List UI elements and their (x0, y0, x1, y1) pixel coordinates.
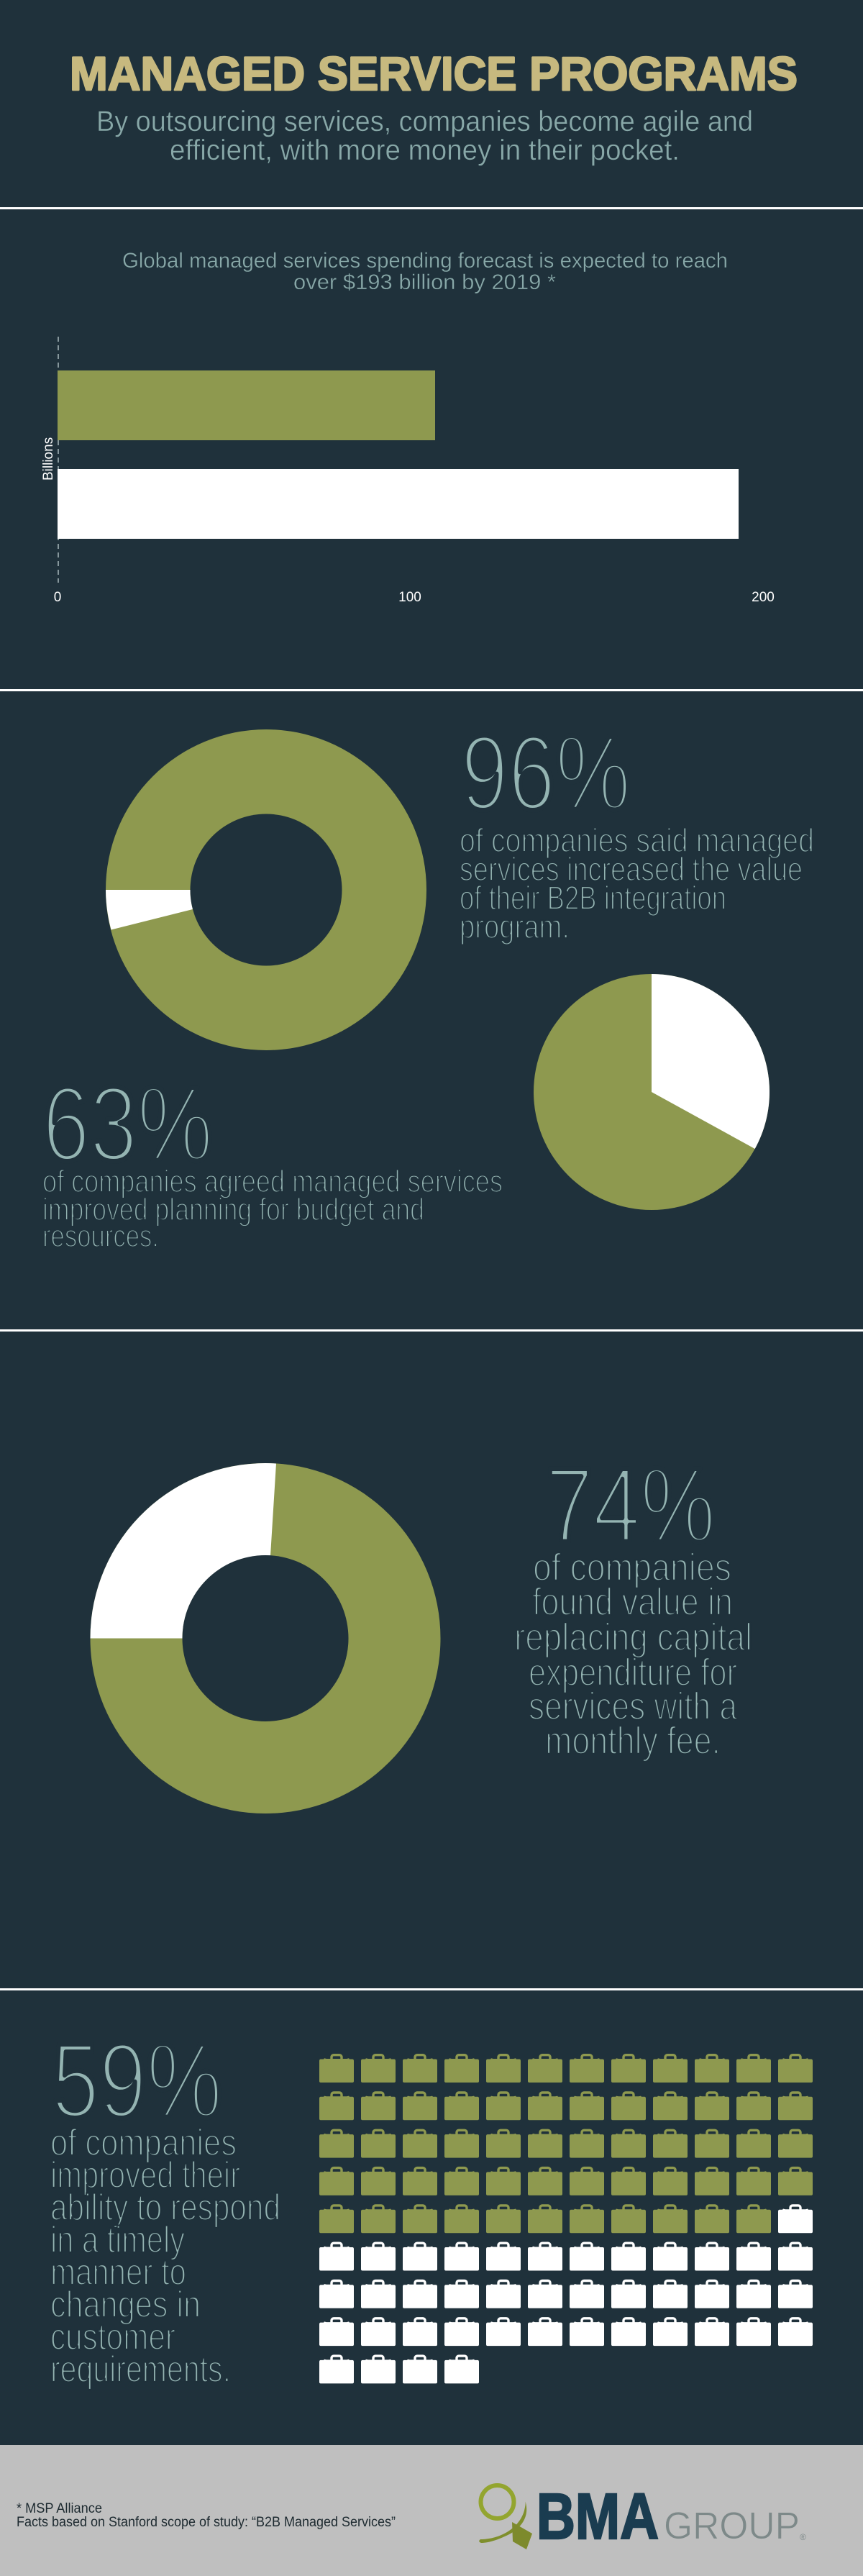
icon: magnifier with tie (479, 2485, 532, 2549)
text: 74% description: of companies (533, 1546, 731, 1589)
text: 59% description: customer (50, 2316, 175, 2358)
text: 96% description: of their B2B integration (460, 879, 726, 916)
bar chart (41, 337, 775, 605)
text: 63% description: resources. (42, 1219, 159, 1254)
briefcase row 2 (319, 2093, 813, 2120)
subtitle: By outsourcing services, companies become agile and (96, 106, 753, 137)
panel: spending forecast (41, 249, 775, 605)
text: 96% description: program. (460, 908, 570, 945)
pie chart: 63% (534, 974, 770, 1210)
text: 74% description (514, 1546, 752, 1762)
stat: 74%: 74% (546, 1446, 716, 1565)
text: 74% description: replacing capital (514, 1616, 752, 1659)
footnotes: * MSP Alliance (17, 2501, 102, 2516)
briefcase row 5 (319, 2206, 813, 2233)
text: 59% description (50, 2122, 280, 2390)
header: title and subtitle (70, 47, 798, 166)
stat: 59%: 59% (52, 2021, 222, 2140)
stat: 96%: 96% (461, 714, 631, 832)
briefcase row 1 (319, 2055, 813, 2083)
text: 74% description: monthly fee. (545, 1719, 721, 1762)
briefcase row 6 (319, 2243, 813, 2270)
text: 59% description: changes in (50, 2284, 201, 2326)
chart title: Global managed services spending forecast is expected to reach (122, 249, 728, 273)
text: 59% description: of companies (50, 2122, 237, 2164)
text: 59% description: improved their (50, 2154, 240, 2196)
briefcase row 4 (319, 2168, 813, 2195)
subtitle: efficient, with more money in their pocket. (170, 135, 680, 166)
donut chart: 96% (106, 729, 426, 1050)
panel: 59 percent stat (50, 2021, 813, 2390)
text: 74% description: found value in (532, 1580, 733, 1624)
donut chart: 74% (91, 1463, 440, 1813)
stat: 63%: 63% (42, 1065, 213, 1183)
axis ticks: 0 (54, 590, 61, 605)
panel: 74 percent stat (91, 1446, 752, 1813)
briefcase row 3 (319, 2130, 813, 2158)
text: 59% description: ability to respond (50, 2187, 280, 2229)
axis ticks (54, 590, 775, 605)
logo wordmark: BMA: BMA (536, 2481, 659, 2553)
text: 63% description: of companies agreed managed services (42, 1164, 503, 1199)
text: 59% description: manner to (50, 2252, 186, 2293)
axis ticks: 100 (398, 590, 421, 605)
chart title (122, 249, 728, 294)
text: 74% description: expenditure for (529, 1651, 737, 1694)
text: 59% description: requirements. (50, 2349, 231, 2390)
text: 96% description (460, 822, 814, 945)
briefcase row 8 (319, 2318, 813, 2346)
registered mark: ® (800, 2532, 806, 2542)
text: 59% description: in a timely (50, 2219, 185, 2261)
text: 96% description: of companies said managed (460, 822, 814, 859)
text: 63% description: improved planning for budget and (42, 1192, 424, 1227)
bar: 2019 forecast (58, 469, 739, 539)
briefcase row 7 (319, 2280, 813, 2308)
logo wordmark: GROUP: GROUP (664, 2505, 800, 2547)
chart title: over $193 billion by 2019 * (293, 270, 556, 294)
title: MANAGED SERVICE PROGRAMS (70, 47, 798, 100)
subtitle (96, 106, 753, 166)
axis ticks: 200 (752, 590, 775, 605)
axis label: Billions (41, 437, 56, 481)
logo: BMA Group (479, 2481, 806, 2553)
footer panel (0, 2445, 863, 2576)
icon grid: 100 briefcases, 59 green and 41 white (319, 2055, 813, 2383)
panel: 96 and 63 percent stats (42, 714, 814, 1254)
bar: current spending (58, 370, 435, 440)
briefcase row 9 (319, 2356, 479, 2383)
text: 74% description: services with a (529, 1685, 738, 1728)
footnotes: Facts based on Stanford scope of study: “B2B Managed Services” (17, 2515, 396, 2530)
footnotes (17, 2501, 396, 2530)
text: 63% description (42, 1164, 503, 1254)
